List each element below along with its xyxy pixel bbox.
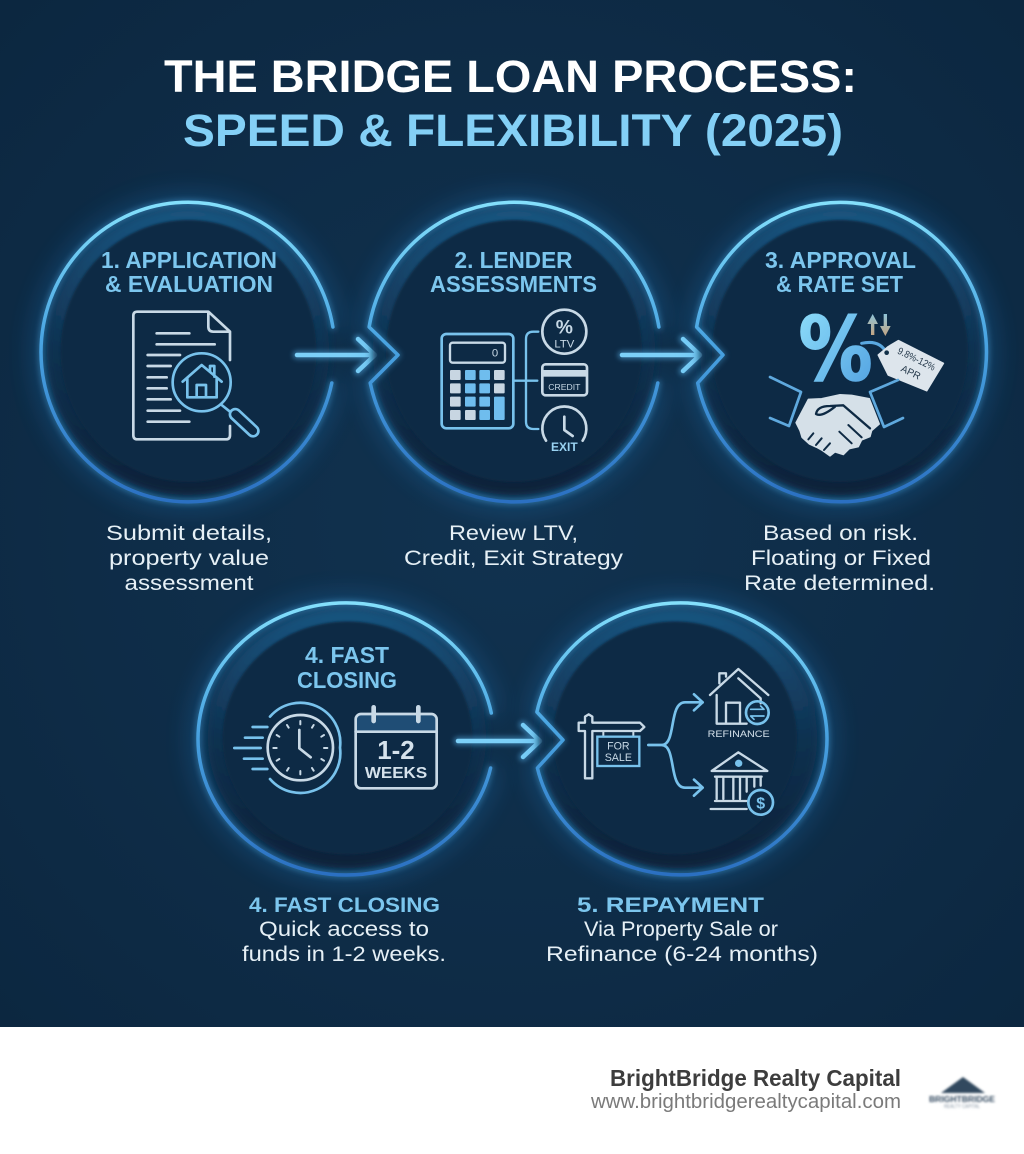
- arrow: step 1 to step 2: [297, 339, 375, 371]
- icon: credit card: CREDIT: [548, 382, 581, 392]
- step 3: approval and rate set: [697, 202, 986, 502]
- step 2 description: Review LTV,: [449, 522, 578, 545]
- step 3 description: Based on risk.: [763, 522, 918, 545]
- step 2: lender assessments: [369, 202, 659, 502]
- icon: credit card: [542, 364, 587, 395]
- step 1: application and evaluation: [41, 202, 333, 502]
- footer panel: [0, 1027, 1024, 1154]
- step 3 description: [744, 522, 935, 595]
- step 1 heading: 1. APPLICATION: [101, 247, 277, 273]
- icon: exit clock: EXIT: [551, 440, 578, 454]
- arrow: step 4 to step 5: [458, 725, 540, 757]
- icon: calculator: 0: [492, 348, 498, 360]
- icon: rate tag: 9.8%-12%: [895, 346, 937, 374]
- icon: rate arrows: [867, 314, 891, 336]
- icon: calendar: WEEKS: [365, 765, 427, 782]
- icon: for sale sign: SALE: [605, 752, 632, 764]
- step 2 heading: ASSESSMENTS: [430, 271, 597, 297]
- step 4: fast closing: [198, 603, 491, 875]
- icon: speeding clock: [234, 703, 340, 793]
- logo: BRIGHTBRIDGE: [929, 1095, 996, 1104]
- step 2 description: [404, 522, 624, 570]
- icon: calendar: 1-2: [377, 735, 415, 765]
- icon: LTV badge: %: [556, 317, 573, 338]
- icon: for sale sign: [579, 714, 644, 778]
- icon: exit clock: [542, 407, 586, 454]
- logo: REALTY CAPITAL: [944, 1104, 980, 1110]
- icon: for sale sign: FOR: [607, 740, 630, 752]
- step 4 heading: CLOSING: [297, 667, 397, 693]
- icon: refinance house: REFINANCE: [708, 729, 770, 739]
- title: SPEED & FLEXIBILITY (2025): [183, 105, 843, 156]
- step 2 heading: [430, 247, 597, 297]
- icon: LTV badge: LTV: [554, 338, 575, 350]
- step 4 description: funds in 1-2 weeks.: [242, 943, 446, 966]
- step 1 description: [106, 522, 272, 595]
- step 4 description: Quick access to: [259, 918, 429, 941]
- icon: document with magnifier: [133, 312, 261, 439]
- icon: handshake: [770, 377, 903, 456]
- step 5 description: [546, 893, 818, 966]
- icon: rate tag: APR: [899, 364, 922, 383]
- title: THE BRIDGE LOAN PROCESS:: [164, 51, 857, 102]
- step 1 heading: [101, 247, 277, 297]
- step 2 description: Credit, Exit Strategy: [404, 547, 624, 570]
- logo: [929, 1077, 996, 1110]
- step 3 description: Rate determined.: [744, 572, 935, 595]
- step 3 heading: [765, 247, 916, 297]
- step 3 heading: 3. APPROVAL: [765, 247, 916, 273]
- step 4 description: 4. FAST CLOSING: [249, 893, 440, 917]
- icon: calculator: [442, 334, 513, 428]
- step 3 heading: & RATE SET: [776, 271, 903, 297]
- step 4 description: [242, 893, 446, 966]
- icon: calendar: [356, 707, 437, 788]
- website: www.brightbridgerealtycapital.com: [590, 1091, 901, 1113]
- title: [164, 51, 857, 156]
- step 5 description: Refinance (6-24 months): [546, 943, 818, 966]
- step 5 description: 5. REPAYMENT: [577, 893, 764, 917]
- step 5 description: Via Property Sale or: [584, 918, 778, 941]
- step 5: repayment: [537, 603, 827, 875]
- icon: rate tag: [862, 341, 943, 391]
- icon: bank with dollar: $: [756, 795, 765, 812]
- step 4 heading: 4. FAST: [305, 642, 389, 668]
- arrow: step 2 to step 3: [622, 339, 700, 371]
- step 4 heading: [297, 642, 397, 693]
- step 3 description: Floating or Fixed: [751, 547, 931, 570]
- step 1 description: Submit details,: [106, 522, 272, 545]
- step 2 heading: 2. LENDER: [454, 247, 573, 273]
- step 1 description: assessment: [124, 572, 254, 595]
- icon: LTV badge: [542, 310, 586, 354]
- brand name: BrightBridge Realty Capital: [610, 1065, 901, 1091]
- connector: calculator to criteria: [514, 332, 538, 429]
- step 1 description: property value: [109, 547, 269, 570]
- icon: bank with dollar: [711, 752, 773, 815]
- icon: percent sign: %: [798, 298, 872, 401]
- icon: branching arrows: [648, 694, 703, 796]
- icon: refinance house: [708, 669, 770, 739]
- step 1 heading: & EVALUATION: [105, 271, 273, 297]
